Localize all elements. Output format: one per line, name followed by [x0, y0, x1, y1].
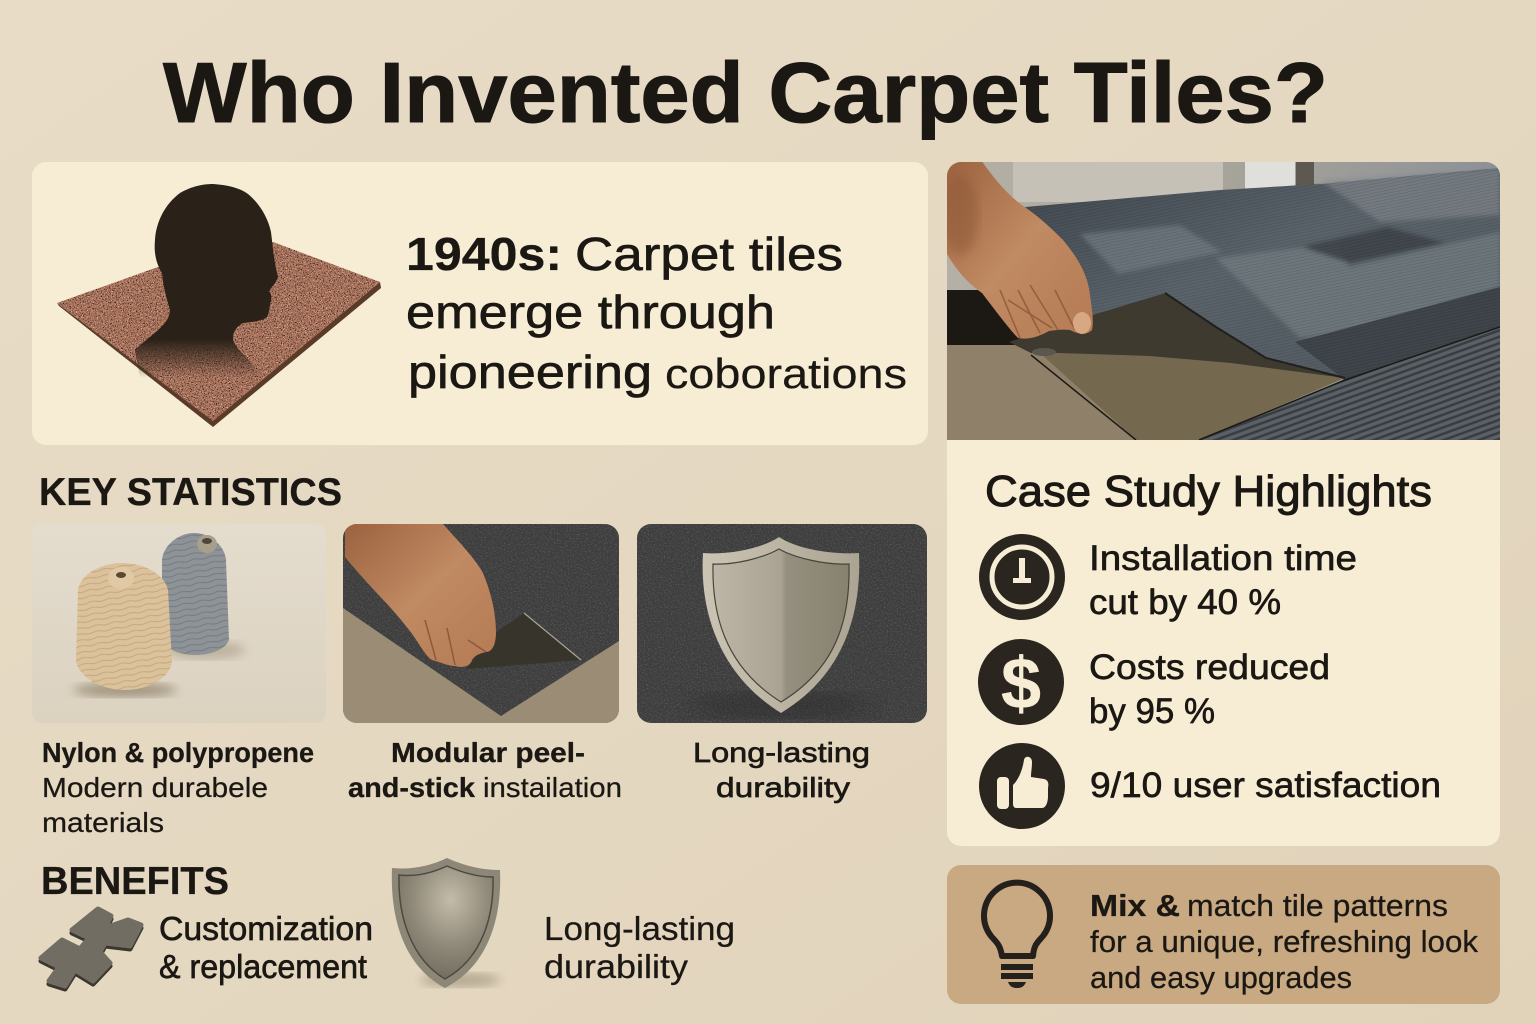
text: customization benefit: & replacement	[159, 948, 367, 985]
stat: satisfaction: 9/10 user satisfaction	[1090, 766, 1441, 805]
text: 1940s headline: coborations	[665, 350, 907, 397]
icon: bronze shield	[392, 858, 500, 988]
text: durability label	[693, 737, 870, 803]
text: tip: for a unique, refreshing look	[1090, 924, 1478, 959]
stat: costs	[978, 639, 1330, 731]
text: 1940s headline: Carpet tiles	[575, 228, 843, 280]
icon: dollar: $	[1001, 644, 1041, 724]
stat: satisfaction	[979, 743, 1441, 829]
text: 1940s headline: emerge through	[406, 286, 775, 338]
text: customization benefit	[159, 910, 373, 985]
text: nylon label	[42, 737, 314, 838]
panel: case study	[942, 160, 1500, 846]
icon: light bulb	[984, 883, 1050, 988]
heading: key statistics: KEY STATISTICS	[39, 471, 342, 514]
text: durability benefit	[544, 910, 735, 985]
heading: benefits: BENEFITS	[41, 860, 229, 903]
text: nylon label: Nylon & polypropene	[42, 737, 314, 768]
stat: costs: by 95 %	[1089, 692, 1215, 731]
text: tip: match tile patterns	[1187, 888, 1448, 923]
icon: dollar	[978, 639, 1064, 725]
text: tip: and easy upgrades	[1090, 960, 1352, 995]
text: modular label: and-stick	[348, 772, 475, 803]
icon: puzzle piece	[41, 909, 141, 989]
stat: installation time: Installation time	[1089, 539, 1357, 578]
panel: tip	[947, 865, 1500, 1004]
text: durability label: durability	[716, 772, 850, 803]
stat: installation time	[979, 534, 1357, 622]
text: modular label: instailation	[483, 772, 622, 803]
text: nylon label: Modern durabele	[42, 772, 268, 803]
text: durability benefit: durability	[544, 948, 689, 985]
image: peel and stick tile	[343, 524, 619, 723]
icon: clock	[979, 534, 1065, 620]
text: durability benefit: Long-lasting	[544, 910, 735, 947]
image: hand lifting carpet tile	[942, 160, 1500, 440]
text: durability label: Long-lasting	[693, 737, 870, 768]
stat: costs: Costs reduced	[1089, 648, 1330, 687]
text: 1940s headline	[406, 228, 907, 398]
text: 1940s headline: pioneering	[408, 346, 652, 398]
text: 1940s headline: 1940s:	[406, 228, 562, 280]
title: Who Invented Carpet Tiles?	[163, 46, 1328, 141]
image: metal shield on carpet	[637, 524, 927, 723]
text: nylon label: materials	[42, 807, 164, 838]
text: tip	[1090, 888, 1478, 995]
text: modular label: Modular peel-	[391, 737, 585, 768]
image: carpet tile with head silhouette	[57, 184, 381, 427]
panel: 1940s origin	[32, 162, 928, 445]
icon: thumbs up	[979, 743, 1065, 829]
stat: installation time: cut by 40 %	[1089, 583, 1281, 622]
image: yarn cones	[32, 524, 326, 723]
text: tip: Mix &	[1090, 888, 1180, 923]
text: modular label	[348, 737, 622, 803]
text: customization benefit: Customization	[159, 910, 373, 947]
heading: case study highlights: Case Study Highlights	[985, 467, 1432, 516]
